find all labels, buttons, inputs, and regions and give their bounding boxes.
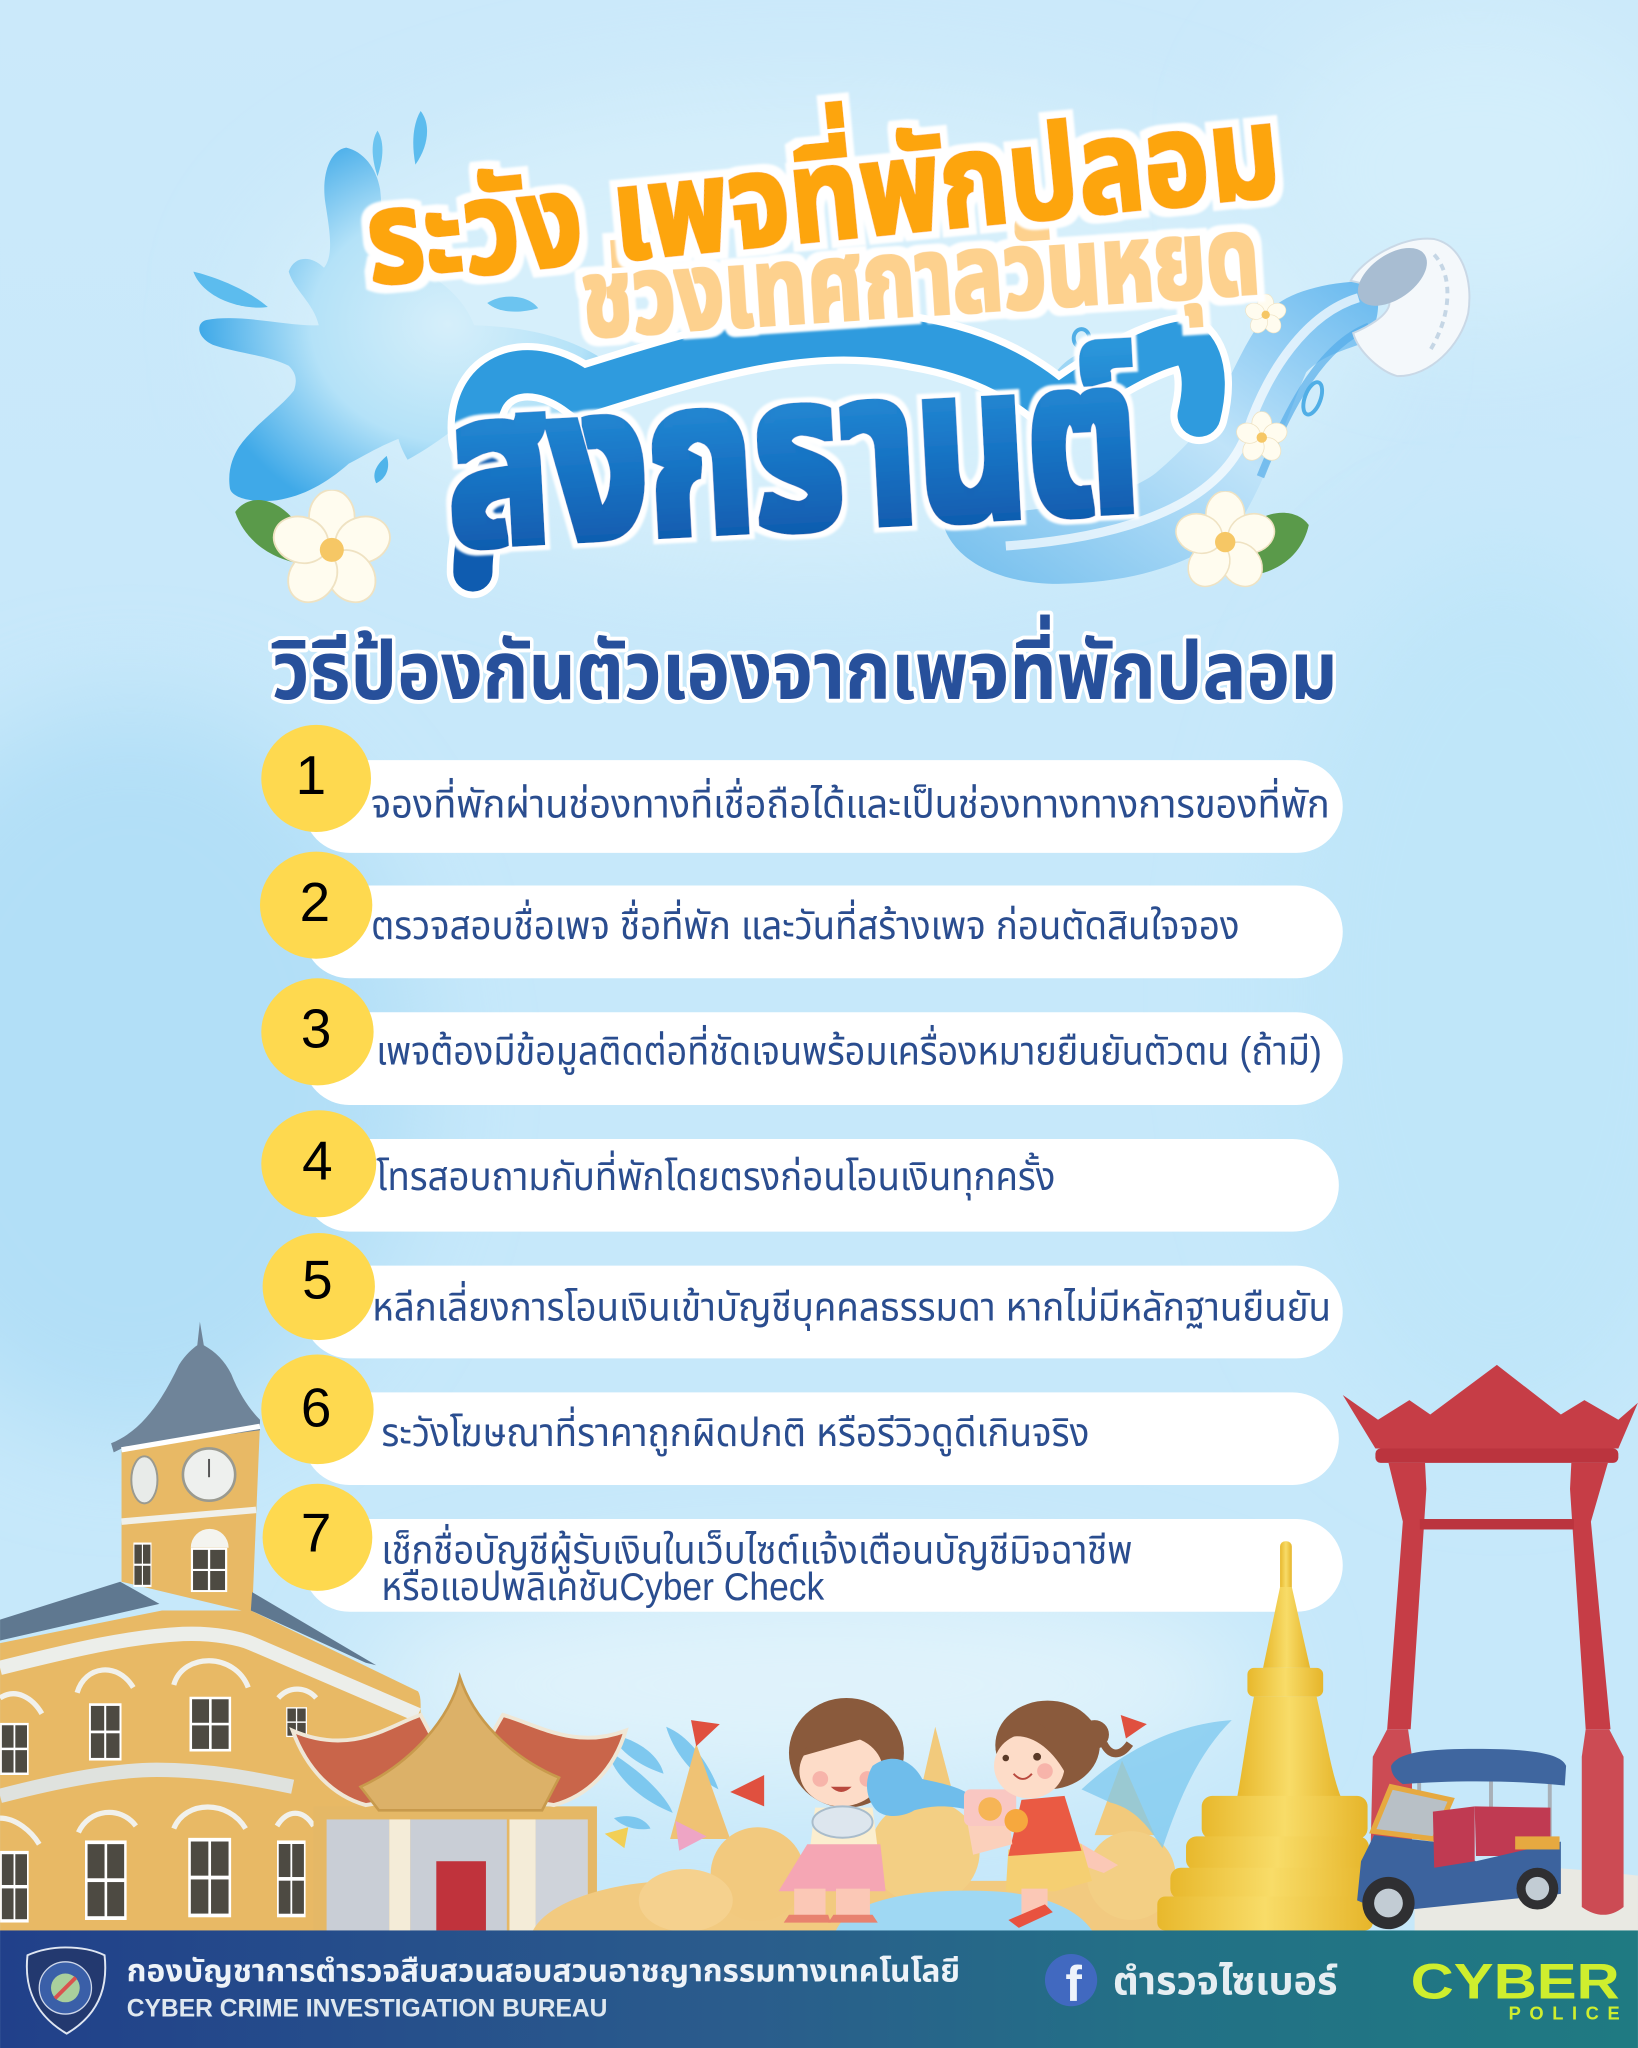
step 3 [261,978,1343,1105]
step 3: เพจต้องมีข้อมูลติดต่อที่ชัดเจนพร้อมเครื่องหมายยืนยันตัวตน (ถ้ามี) [376,1024,1322,1074]
illustration: golden stupa [1157,1541,1373,1930]
icon: facebook [1045,1954,1097,2012]
step 3: 3 [301,998,331,1060]
step 2: ตรวจสอบชื่อเพจ ชื่อที่พัก และวันที่สร้างเพจ ก่อนตัดสินใจจอง [371,899,1240,948]
step 5: หลีกเลี่ยงการโอนเงินเข้าบัญชีบุคคลธรรมดา หากไม่มีหลักฐานยืนยัน [372,1280,1331,1330]
illustration: child with water gun [964,1701,1130,1928]
step 7: หรือแอปพลิเคชันCyber Check [381,1566,825,1609]
gable [361,1677,559,1810]
roof [1391,1749,1566,1785]
tower [122,1424,260,1613]
title graphic [193,59,1469,612]
facebook page name: ตำรวจไซเบอร์ [1113,1960,1338,2003]
tower roof [111,1322,260,1452]
face [994,1733,1065,1799]
title line two: ช่วงเทศกาลวันหยุด [578,195,1264,366]
step 6: 6 [301,1376,331,1438]
flags [691,1720,720,1746]
step 7 [263,1484,1343,1612]
step 4: 4 [302,1129,333,1191]
body [810,1808,878,1849]
songkran tail stroke [473,335,1203,572]
agency name english: CYBER CRIME INVESTIGATION BUREAU [127,1996,607,2023]
step 4 [261,1110,1339,1232]
roof wings [293,1715,460,1805]
wheels [1362,1877,1415,1929]
leg [1021,1889,1048,1915]
bowl [812,1806,873,1838]
heading: วิธีป้องกันตัวเองจากเพจที่พักปลอม [271,614,1338,717]
upper windows [189,1697,231,1752]
illustration: ground under swing [1415,1866,1638,1930]
illustration: child with bowl [779,1698,904,1923]
step 1 [261,725,1343,853]
agency name thai: กองบัญชาการตำรวจสืบสวนสอบสวนอาชญากรรมทางเทคโนโลยี [127,1953,960,1988]
face [799,1736,883,1806]
illustration: giant swing [1343,1365,1638,1915]
icon: water bowl and stream [942,236,1469,584]
footer bar [0,1930,1638,2048]
body [1357,1835,1561,1912]
icon: small flower on stream [1243,294,1288,336]
back leg [1071,1842,1118,1873]
arms and gun [967,1809,1012,1855]
illustration: water splash behind stupa [1082,1720,1232,1848]
title line one: ระวัง เพจที่พักปลอม [358,59,1286,313]
skirt [779,1844,886,1891]
sandals [784,1915,831,1923]
illustration: tuk-tuk [1357,1749,1566,1929]
icon: police shield logo [27,1947,105,2034]
step 1: จองที่พักผ่านช่องทางที่เชื่อถือได้และเป็นช่องทางทางการของที่พัก [371,778,1330,827]
legs [794,1889,826,1917]
white bands [0,1634,418,1715]
illustration: sand pagodas [533,1715,1176,1932]
cyber police logo [1411,1953,1620,2023]
icon: right plumeria flower with leaf [1171,491,1309,595]
step 6: ระวังโฆษณาที่ราคาถูกผิดปกติ หรือรีวิวดูดีเกินจริง [381,1406,1089,1456]
illustration: water gun splash [867,1759,972,1816]
step 6 [261,1354,1339,1485]
roofs [0,1582,159,1640]
illustration: clock tower building [0,1322,421,1930]
illustration: water pool [836,1891,1092,1930]
step list [260,725,1343,1612]
icon: clock faces [131,1448,235,1503]
pants [1006,1844,1092,1891]
step 7: 7 [301,1502,331,1564]
hair [789,1698,904,1808]
step 7: เช็กชื่อบัญชีผู้รับเงินในเว็บไซต์แจ้งเตือนบัญชีมิจฉาชีพ [381,1524,1132,1573]
step 2 [260,852,1343,978]
illustration: temple [293,1677,626,1930]
icon: left plumeria flower with leaf [235,490,396,612]
door [436,1861,486,1930]
step 5: 5 [302,1248,333,1310]
songkran word: สงกรานต์ [440,315,1144,592]
seats [1475,1806,1550,1856]
icon: small flower mid stream [1234,411,1290,465]
step 5 [263,1233,1343,1358]
cyber police logo: CYBER [1411,1953,1620,2009]
step 1: 1 [296,744,326,806]
lower windows [188,1838,231,1917]
red top [1008,1796,1082,1856]
windscreen [1373,1787,1451,1839]
icon: facebook: f [1065,1956,1082,2012]
illustration: water splash behind sand pagodas left [607,1727,718,1829]
step 2: 2 [300,871,330,933]
cyber police logo: POLICE [1509,2002,1620,2023]
icon: water splash [193,111,614,501]
window arches [0,1661,316,1844]
step 4: โทรสอบถามกับที่พักโดยตรงก่อนโอนเงินทุกครั้ง [376,1150,1055,1200]
hair [995,1701,1100,1789]
